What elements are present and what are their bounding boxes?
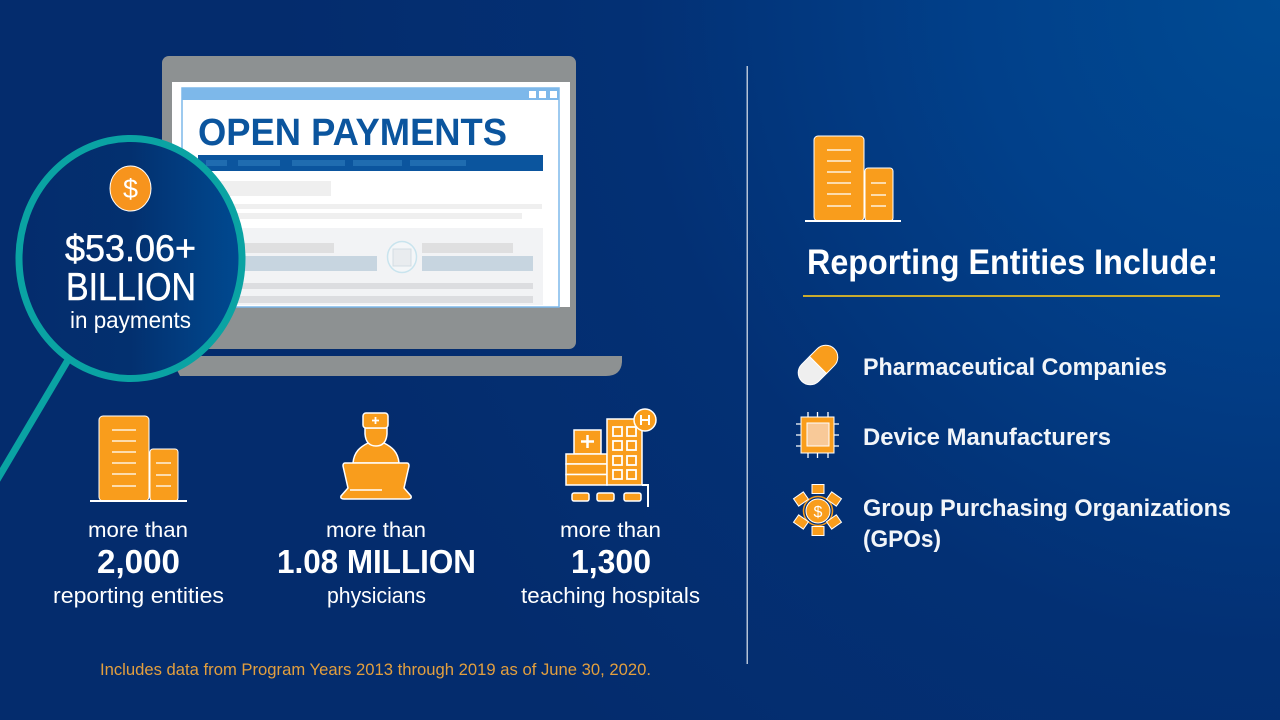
stat: physicians: physicians	[327, 583, 426, 608]
list item: pharmaceutical companies: Pharmaceutical Companies	[863, 354, 1167, 381]
icon: dollar coin	[110, 166, 151, 211]
icon: microchip	[796, 412, 839, 458]
stat: teaching hospitals: teaching hospitals	[521, 583, 700, 608]
icon: office buildings	[805, 136, 901, 222]
stat: physicians: 1.08 MILLION	[277, 543, 476, 580]
screen nav bar	[198, 155, 543, 171]
total amount: $53.06+	[65, 228, 196, 269]
icon: physician at laptop	[341, 413, 411, 499]
stat text: more than	[88, 519, 188, 542]
laptop illustration	[162, 56, 622, 376]
caption: in payments	[70, 307, 191, 333]
divider	[746, 66, 748, 664]
icon: office buildings	[90, 416, 187, 502]
magnifier handle	[0, 360, 68, 480]
list item: device manufacturers	[796, 412, 1111, 458]
list item: group purchasing organizations: Group Purchasing Organizations	[863, 495, 1231, 522]
list item: group purchasing organizations: (GPOs)	[863, 526, 941, 553]
stat text: more than	[560, 519, 661, 542]
screen content placeholders	[188, 181, 543, 305]
icon: pill	[793, 340, 843, 390]
panel: reporting entities include	[793, 136, 1231, 553]
stat text: more than	[326, 519, 426, 542]
laptop screen	[172, 82, 570, 307]
icon: purchasing group	[794, 484, 841, 536]
panel heading: Reporting Entities Include:	[807, 243, 1218, 282]
stat: reporting entities	[53, 416, 224, 608]
magnifier: payments total	[0, 138, 242, 480]
stat: teaching hospitals: 1,300	[571, 543, 651, 580]
icon: hospital	[566, 409, 656, 507]
stat: reporting entities: reporting entities	[53, 583, 224, 608]
screen heading: OPEN PAYMENTS	[198, 112, 507, 154]
icon: purchasing group: $	[814, 504, 823, 521]
list item: pharmaceutical companies	[793, 340, 1167, 390]
stat: teaching hospitals	[521, 409, 700, 608]
icon: dollar coin: $	[123, 174, 138, 204]
stat: physicians	[277, 413, 476, 608]
stat: reporting entities: 2,000	[97, 543, 180, 580]
laptop lid	[162, 56, 576, 349]
unit: BILLION	[66, 266, 196, 309]
heading rule	[803, 295, 1220, 297]
laptop base	[170, 356, 622, 376]
list item: device manufacturers: Device Manufacturers	[863, 424, 1111, 451]
list item: group purchasing organizations	[794, 484, 1231, 553]
magnifier lens	[19, 138, 242, 378]
footnote: Includes data from Program Years 2013 through 2019 as of June 30, 2020.	[100, 660, 651, 679]
